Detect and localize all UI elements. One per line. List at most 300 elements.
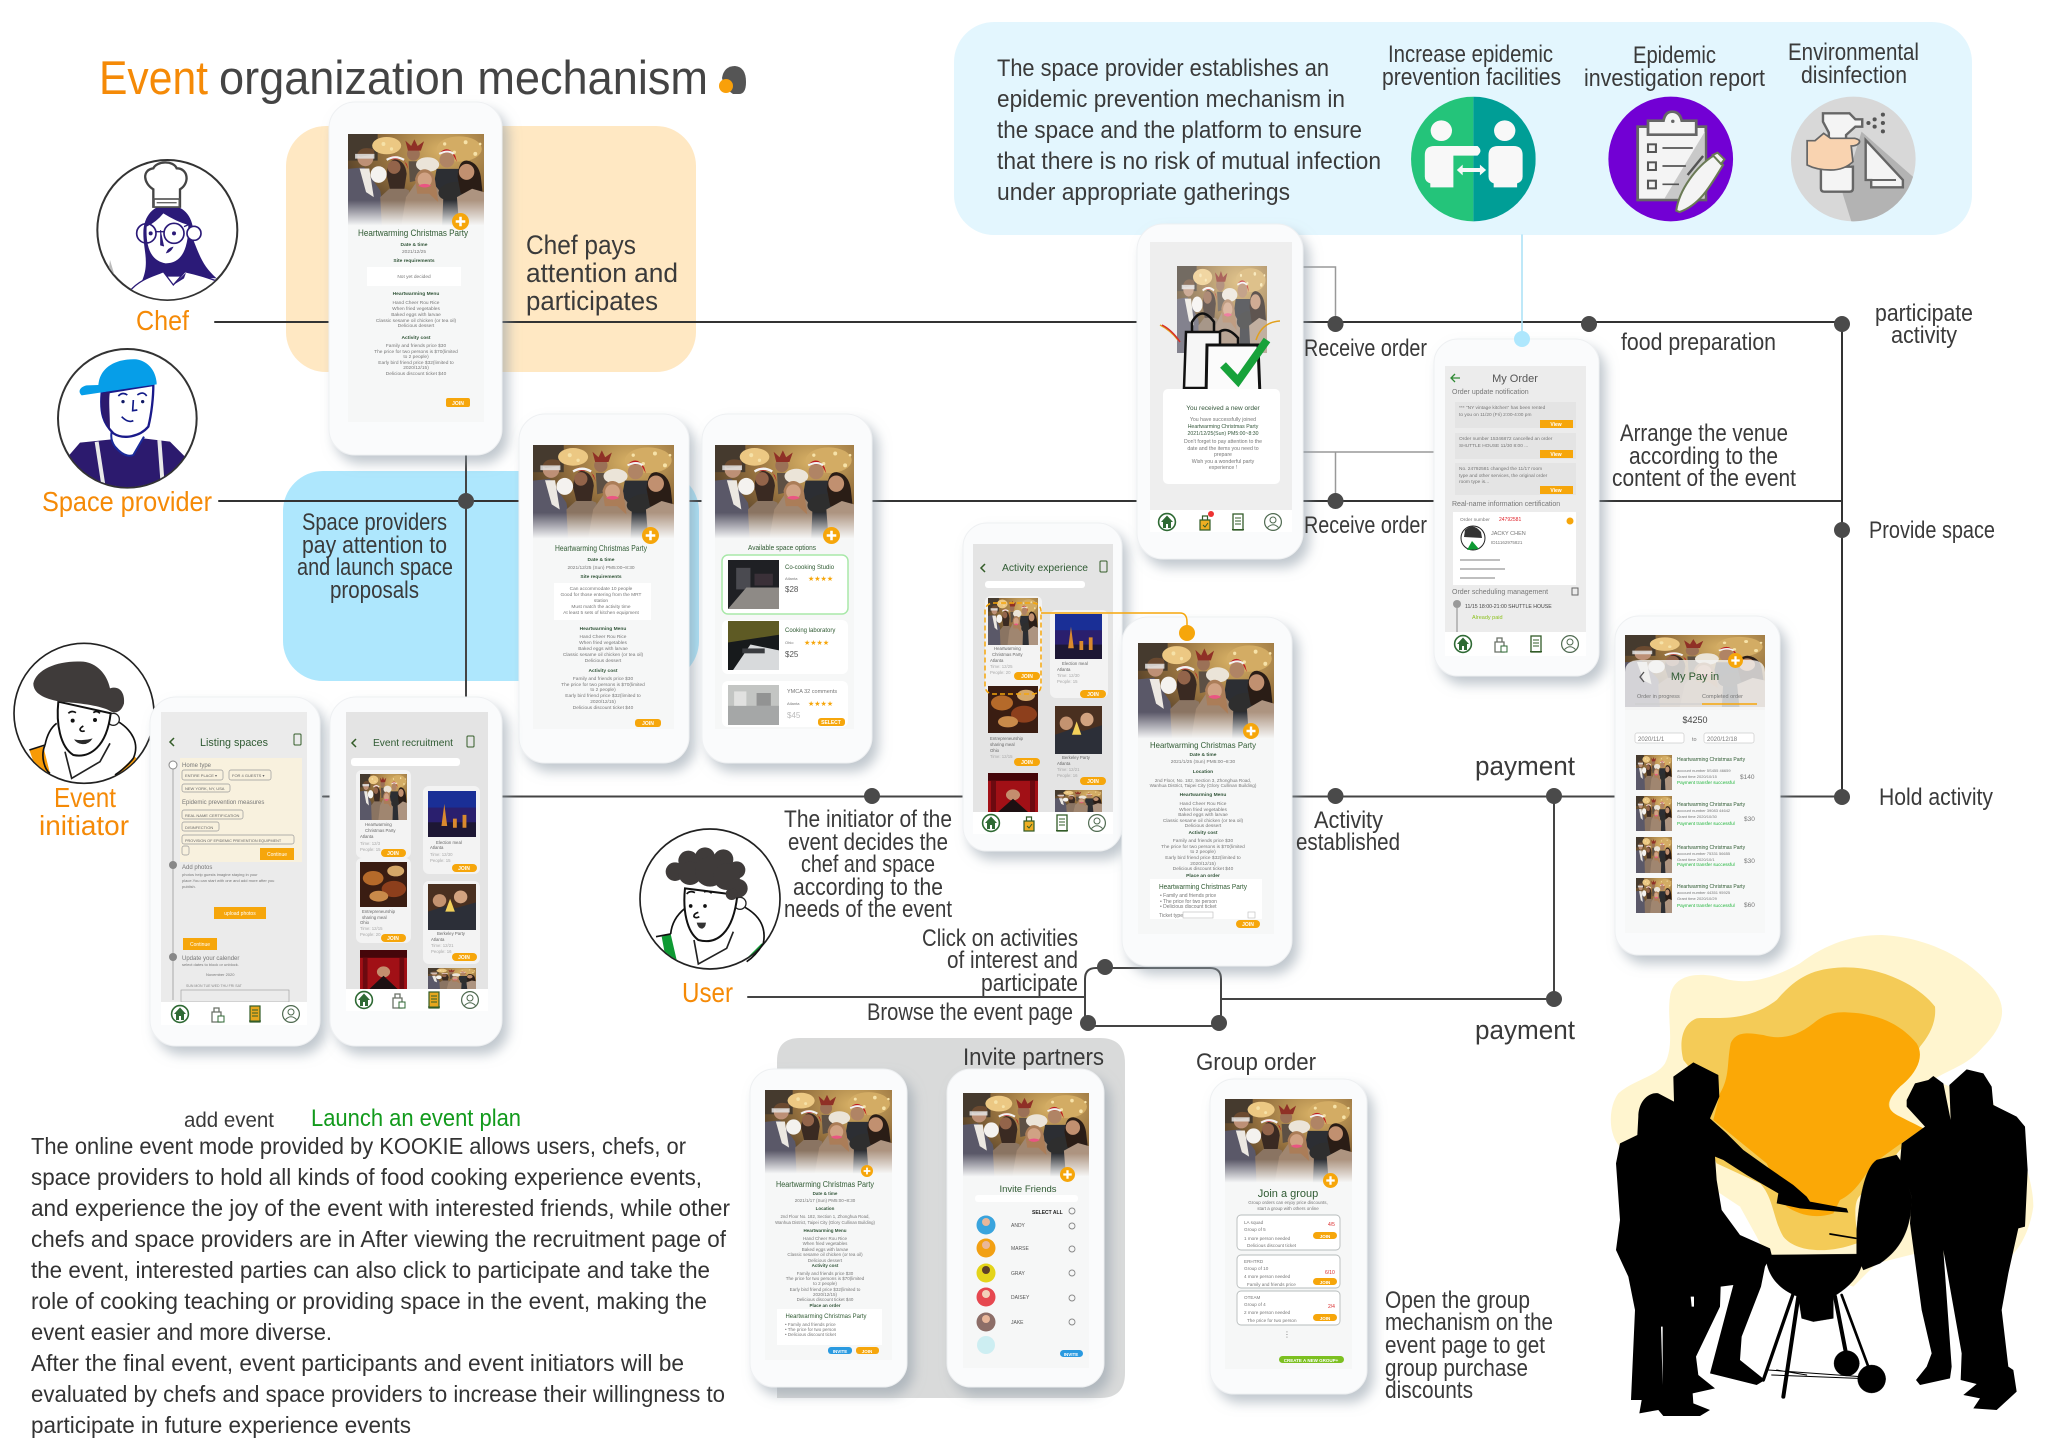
phone: activity experience xyxy=(963,523,1122,851)
phone: my pay in: Heartwarming Christmas Party xyxy=(1677,757,1746,763)
label: event initiator xyxy=(39,782,129,841)
phone: activity experience: JOIN xyxy=(1021,760,1033,766)
phone: receive order confirmation: Don't forget to pay attention to the xyxy=(1184,439,1262,445)
phone: event details with order: When fried vegetables xyxy=(1179,807,1227,813)
phone: space proposal: Baked eggs with larvae xyxy=(578,646,628,652)
phone: my order: JACKY CHEN xyxy=(1491,531,1526,537)
phone: join a group: 4 more person needed xyxy=(1244,1274,1291,1279)
phone: invite event page: • Delicious discount ticket xyxy=(785,1332,837,1337)
phone: invite event page: Hand Cheer Rou Rice xyxy=(803,1236,848,1241)
phone: event details with order: Classic sesame oil chicken (or tea oil) xyxy=(1163,818,1244,824)
phone: event recruitment: Atlanta xyxy=(430,845,444,850)
phone: chef event page: Early bird friend price $32(limited to xyxy=(378,360,454,366)
phone: event details with order xyxy=(1122,617,1292,966)
connector dot: orange xyxy=(1179,625,1195,641)
phone: my pay in: Heartwarming Christmas Party xyxy=(1677,802,1746,808)
phone: my order: No. 24792581 changed the 11/17 room xyxy=(1459,466,1542,472)
friend list: JAKE xyxy=(1011,1320,1024,1326)
text block: description: After the final event, event participants and event initiators will be xyxy=(31,1350,684,1376)
phone: my order: ID11162975821 xyxy=(1491,540,1523,545)
phone: event details with order: Date & time xyxy=(1190,752,1217,758)
phone: my pay in xyxy=(1615,616,1780,955)
phone: receive order confirmation: Wish you a wonderful party xyxy=(1192,459,1255,465)
phone: my pay in: account number 5S455 46659 xyxy=(1677,768,1731,773)
label: participate activity: participate xyxy=(1875,300,1973,327)
phone: event recruitment: Ohio xyxy=(360,920,370,925)
label: event initiator: initiator xyxy=(39,810,129,841)
silhouette: grill xyxy=(1763,1155,1912,1397)
phone: invite event page: Baked eggs with larvae xyxy=(802,1247,849,1252)
label: space provider: Space provider xyxy=(42,486,212,517)
phone: activity experience: Atlanta xyxy=(990,658,1004,663)
text block: description: participate in future experience events xyxy=(31,1412,411,1438)
phone: listing spaces form: NEW YORK, NY, USA xyxy=(185,786,225,791)
phone: space proposal: Must match the activity time xyxy=(571,604,631,610)
text: space providers launch proposals: and launch space xyxy=(297,554,453,581)
phone: join a group: OTEAM xyxy=(1244,1295,1261,1300)
friend list: ANDY xyxy=(1011,1223,1026,1229)
phone: listing spaces form: FOR 4 GUESTS ▾ xyxy=(232,773,264,778)
phone: listing spaces form: publish. xyxy=(182,884,196,889)
connector: selected event to detail page xyxy=(985,603,1187,694)
phone: my order: Order number 15346872 cancelled an order xyxy=(1459,436,1553,442)
phone: my order: 11/15 18:00-21:00 SHUTTLE HOUSE xyxy=(1465,604,1552,610)
phone: event details with order: • Delicious discount ticket xyxy=(1160,904,1217,910)
phone: event recruitment: Heartwarming xyxy=(365,822,392,827)
label: open the group mechanism: discounts xyxy=(1385,1377,1473,1404)
icon: space provider avatar xyxy=(58,349,197,493)
text: space providers launch proposals xyxy=(297,509,453,604)
phone: event details with order: • The price for two person xyxy=(1160,899,1217,905)
phone: event recruitment: Time: 12/15 xyxy=(360,926,383,931)
phone: listing spaces form: Home type xyxy=(182,763,212,769)
label: click on activities: Click on activities xyxy=(922,925,1078,952)
phone: join a group: ERHTRD xyxy=(1244,1259,1264,1264)
phone: chef event page: Family and friends price $30 xyxy=(386,343,446,349)
icon: user avatar xyxy=(640,829,780,970)
phone: receive order confirmation: date and the items you need to xyxy=(1187,446,1259,452)
phone: event recruitment: Time: 12/3 xyxy=(360,841,381,846)
icon: title badge xyxy=(719,66,746,94)
phone: event recruitment: Berkeley Party xyxy=(437,931,466,936)
phone: invite event page: Delicious discount ticket $40 xyxy=(797,1297,854,1302)
label: arrange the venue: Arrange the venue xyxy=(1620,420,1788,447)
phone: invite friends: INVITE xyxy=(1064,1352,1078,1357)
heading: epidemic investigation report: investigation report xyxy=(1584,65,1765,92)
phone: listing spaces form: photos help guests imagine staying in your xyxy=(182,872,258,877)
phone: event details with order: Hand Cheer Rou Rice xyxy=(1180,801,1227,807)
phone: invite event page: Activity cost xyxy=(812,1263,839,1268)
phone: listing spaces form: Add photos xyxy=(182,865,212,871)
phone: event recruitment: Atlanta xyxy=(360,834,374,839)
phone: join a group: The price for two person xyxy=(1247,1318,1297,1323)
phone: chef event page: 2021/12/25 xyxy=(402,249,426,255)
phone: activity experience: JOIN xyxy=(1087,692,1099,698)
text: epidemic prevention mechanism xyxy=(997,55,1381,206)
connector dot: light blue xyxy=(1514,331,1530,347)
label: click on activities: participate xyxy=(981,970,1078,997)
label: launch an event plan: Launch an event plan xyxy=(311,1105,521,1132)
label: click on activities: of interest and xyxy=(947,947,1078,974)
phone: space proposal: Delicious dessert xyxy=(585,658,622,664)
panel: invite partners grey backdrop xyxy=(777,1038,1125,1398)
phone: my order: SHUTTLE HOUSE 11/30 8:00 ... xyxy=(1459,443,1528,449)
label: initiator decides: according to the xyxy=(793,874,943,901)
phone: event recruitment: Event recruitment xyxy=(373,738,453,749)
phone: available space options: ★★★★ xyxy=(808,700,833,708)
phone: event details with order: • Family and friends price xyxy=(1160,893,1216,899)
phone: join a group: 2/4 xyxy=(1328,1304,1335,1310)
phone: space proposal: Can accommodate 10 people xyxy=(570,586,633,592)
label: open the group mechanism: Open the group xyxy=(1385,1287,1530,1314)
label: add event: add event xyxy=(184,1109,274,1132)
text: space providers launch proposals: Space providers xyxy=(302,509,447,536)
text: epidemic prevention mechanism: under appropriate gatherings xyxy=(997,179,1290,206)
phone: available space options: Co-cooking Studio xyxy=(785,565,835,571)
phone: my order: Order update notification xyxy=(1452,389,1529,396)
phone: event details with order: Activity cost xyxy=(1188,830,1218,836)
heading: increase epidemic prevention facilities xyxy=(1382,41,1561,91)
phone: join a group: Delicious discount ticket xyxy=(1247,1243,1297,1248)
phone: event details with order: 2021/1/25 (Sun) PM5:00~8:30 xyxy=(1171,759,1236,765)
label: chef: Chef xyxy=(136,305,189,336)
phone: event recruitment: Election meal xyxy=(436,840,462,845)
phone: join a group: Group of 10 xyxy=(1244,1266,1269,1271)
phone: my order: Already paid xyxy=(1472,615,1503,621)
phone: activity experience: Entrepreneurship xyxy=(990,736,1024,741)
phone: my order: View xyxy=(1550,488,1562,494)
label: hold activity: Hold activity xyxy=(1879,784,1993,811)
phone: chef event page: Not yet decided xyxy=(397,274,431,280)
phone: space proposal: station xyxy=(594,598,608,604)
phone: listing spaces form: Epidemic prevention measures xyxy=(182,800,264,806)
phone: chef event page: 2020/12/15) xyxy=(403,365,429,371)
phone: activity experience: Atlanta xyxy=(1057,761,1071,766)
phone: my order: to you on 11/20 (Fri) 2:00-4:00 pm xyxy=(1459,412,1531,418)
text block: description: role of cooking teaching or providing space in the event, making the xyxy=(31,1288,707,1314)
icon: disinfection spray xyxy=(1791,97,1917,223)
phone: listing spaces form: ENTIRE PLACE ▾ xyxy=(185,773,217,778)
silhouette: left people xyxy=(1616,1062,1848,1416)
text: epidemic prevention mechanism: The space provider establishes an xyxy=(997,55,1329,82)
phone: event details with order: 2020/12/15) xyxy=(1190,861,1216,867)
phone: receive order confirmation: You have successfully joined xyxy=(1190,417,1256,423)
phone: invite event page: Date & time xyxy=(813,1191,838,1196)
label: participate activity: activity xyxy=(1891,322,1957,349)
label: arrange the venue xyxy=(1612,420,1796,492)
phone: my pay in: Grant time 2020/10/29 xyxy=(1677,896,1718,901)
phone: event recruitment: Time: 12/21 xyxy=(431,943,454,948)
phone: listing spaces form: SUN MON TUE WED THU FRI SAT xyxy=(186,984,243,988)
phone: my pay in: Heartwarming Christmas Party xyxy=(1677,845,1746,851)
phone: invite event page: • Family and friends price xyxy=(785,1322,836,1327)
phone: activity experience: Heartwarming xyxy=(994,646,1021,651)
phone: invite event page: • The price for two person xyxy=(785,1327,837,1332)
flow nodes xyxy=(458,316,1850,1031)
photo: party xyxy=(348,134,484,226)
phone: invite event page: Delicious dessert xyxy=(808,1258,843,1263)
flow lines and connectors xyxy=(215,235,1842,1026)
text block: description: event easier and more diverse. xyxy=(31,1319,332,1345)
icon: chef avatar xyxy=(97,160,237,307)
panel: epidemic prevention xyxy=(954,22,1972,235)
phone: event recruitment xyxy=(330,697,502,1046)
phone: space proposal: At least 5 sets of kitchen equipment xyxy=(563,610,640,616)
phone: join a group: Group of 4 xyxy=(1244,1302,1266,1307)
phone: join a group: JOIN xyxy=(1320,1234,1330,1239)
phone: my order xyxy=(1434,339,1599,676)
phone: chef event page: The price for two persons is $70(limited xyxy=(374,349,458,355)
phone: available space options: $25 xyxy=(785,650,799,659)
phone: space proposal: 2020/12/15) xyxy=(590,699,616,705)
text: chef pays attention xyxy=(526,230,678,316)
phone: chef event page: Baked eggs with larvae xyxy=(391,312,441,318)
phone: event recruitment: JOIN xyxy=(458,866,470,872)
phone: join a group: Group orders can enjoy price discounts, xyxy=(1248,1200,1328,1205)
phone: available space options: ★★★★ xyxy=(804,639,829,647)
phone: listing spaces form xyxy=(150,697,320,1046)
phone: available space options: Atlanta xyxy=(787,701,800,706)
phone: chef event page: to 2 people) xyxy=(403,354,429,360)
label: open the group mechanism: group purchase xyxy=(1385,1355,1528,1382)
phone: my order: room type is... xyxy=(1459,479,1489,485)
label: activity established: established xyxy=(1296,829,1400,856)
phone: space proposal: When fried vegetables xyxy=(579,640,627,646)
phone: invite event page: to 2 people) xyxy=(813,1281,837,1286)
phone: my order: 24792581 xyxy=(1499,517,1521,523)
icon: event initiator avatar xyxy=(14,643,154,783)
phone: chef event page: Delicious discount ticket $40 xyxy=(386,371,447,377)
phone: space proposal: Classic sesame oil chicken (or tea oil) xyxy=(563,652,644,658)
text: chef pays attention: Chef pays xyxy=(526,230,636,260)
phone: available space options: $45 xyxy=(787,711,801,720)
text: chef pays attention: participates xyxy=(526,286,658,316)
text block: description: evaluated by chefs and space providers to increase their willingness to xyxy=(31,1381,725,1407)
phone: chef event page: When fried vegetables xyxy=(392,306,440,312)
phone: invite event page: Heartwarming Menu xyxy=(803,1228,847,1233)
heading: environmental disinfection xyxy=(1788,39,1919,89)
label: open the group mechanism: event page to get xyxy=(1385,1332,1545,1359)
text: space providers launch proposals: proposals xyxy=(330,577,419,604)
label: click on activities xyxy=(922,925,1078,997)
phone: event recruitment: sharing meal xyxy=(362,915,387,920)
label: receive order chef: Receive order xyxy=(1304,335,1427,362)
phone: activity experience: Time: 12/25 xyxy=(990,664,1013,669)
phone: my pay in: $4250 xyxy=(1682,715,1708,725)
label: payment lower: payment xyxy=(1475,1015,1575,1045)
phone: my order: Real-name information certification xyxy=(1452,501,1560,508)
text block: description xyxy=(31,1133,730,1438)
label: initiator decides: needs of the event xyxy=(784,896,952,923)
phone: event recruitment: People: 15 xyxy=(430,858,451,863)
phone: available space options: YMCA 32 comments xyxy=(787,689,837,695)
phone: my pay in: $140 xyxy=(1740,774,1755,781)
phone: join a group: Group of 5 xyxy=(1244,1227,1266,1232)
phone: my order: My Order xyxy=(1492,373,1538,385)
phone: invite event page: Location xyxy=(816,1206,835,1211)
phone: my order: View xyxy=(1550,422,1562,428)
phone: listing spaces form: select dates to block or unblock. xyxy=(182,962,239,967)
label: open the group mechanism: mechanism on the xyxy=(1385,1309,1553,1336)
label: initiator decides xyxy=(784,806,952,923)
phone: event recruitment: Atlanta xyxy=(431,937,445,942)
label: payment upper: payment xyxy=(1475,751,1575,781)
label: arrange the venue: according to the xyxy=(1629,443,1778,470)
phone: chef event page: Heartwarming Christmas Party xyxy=(358,228,468,238)
phone: receive order confirmation: You received a new order xyxy=(1186,405,1261,412)
phone: event recruitment: People: 16 xyxy=(431,949,452,954)
illustration: barbecue silhouettes over colour blobs xyxy=(1611,935,2033,1416)
phone: listing spaces form: Update your calender xyxy=(182,956,239,962)
phone: invite event page: 2021/1/17 (Sun) PM5:00~8:30 xyxy=(795,1198,856,1203)
phone: activity experience: Atlanta xyxy=(1057,667,1071,672)
phone: event recruitment: Christmas Party xyxy=(365,828,396,833)
phone: event details with order: Ticket type xyxy=(1159,913,1183,919)
phone: activity experience: JOIN xyxy=(1021,674,1033,680)
phone: activity experience: Ohio xyxy=(990,748,1000,753)
phone: listing spaces form: November 2020 xyxy=(206,972,235,977)
phone: my pay in: Grant time 2020/10/1 xyxy=(1677,857,1715,862)
phone: join a group: 1 more person needed xyxy=(1244,1236,1291,1241)
friend list: GRAY xyxy=(1011,1271,1025,1277)
label: provide space: Provide space xyxy=(1869,517,1995,544)
text: epidemic prevention mechanism: epidemic prevention mechanism in xyxy=(997,86,1345,113)
phone: event recruitment: People: 15 xyxy=(360,847,381,852)
phone: receive order confirmation: experience ! xyxy=(1209,465,1237,471)
phone: listing spaces form: Continue xyxy=(190,942,210,948)
friend list: DAISEY xyxy=(1011,1295,1030,1301)
phone: my pay in: Completed order xyxy=(1702,694,1743,700)
phone: space proposal: Hand Cheer Rou Rice xyxy=(580,634,627,640)
phone: receive order confirmation xyxy=(1137,224,1303,559)
phone: receive order confirmation: Heartwarming Christmas Party xyxy=(1188,424,1259,430)
phone: space proposal: Activity cost xyxy=(588,668,618,674)
phone: my pay in: Payment transfer successful xyxy=(1677,862,1735,867)
phone: join a group: Family and friends price xyxy=(1247,1282,1296,1287)
label: participate activity xyxy=(1875,300,1973,349)
phone: chef event page xyxy=(329,102,502,455)
phone: my pay in: Heartwarming Christmas Party xyxy=(1677,884,1746,890)
phone: invite friends: SELECT ALL xyxy=(1032,1210,1063,1216)
phone: space proposal: to 2 people) xyxy=(590,687,616,693)
phone: my order: Order scheduling management xyxy=(1452,589,1548,596)
text block: description: The online event mode provided by KOOKIE allows users, chefs, or xyxy=(31,1133,686,1159)
phone: activity experience: Election meal xyxy=(1062,661,1088,666)
phone: chef event page: Classic sesame oil chicken (or tea oil) xyxy=(376,318,457,324)
heading: epidemic investigation report: Epidemic xyxy=(1633,42,1716,69)
phone: event details with order: to 2 people) xyxy=(1190,849,1216,855)
phone: invite event page: 2nd Floor No. 182, Section 1, Zhonghua Road, xyxy=(780,1214,870,1219)
label: invite partners: Invite partners xyxy=(963,1044,1104,1071)
label: user: User xyxy=(682,977,733,1008)
phone: chef event page: Heartwarming Menu xyxy=(393,291,439,297)
phone: my pay in: My Pay in xyxy=(1671,671,1719,683)
phone: listing spaces form: upload photos xyxy=(224,911,256,917)
phone: my pay in: $60 xyxy=(1744,902,1755,909)
phone: invite event page: Early bird friend price $32(limited to xyxy=(790,1287,861,1292)
phone: available space options: Atlanta xyxy=(785,576,798,581)
phone: my pay in: account number 75331 56655 xyxy=(1677,851,1731,856)
phone: event details with order: 2nd Floor, No. 182, Section 3, Zhonghua Road, xyxy=(1155,778,1251,783)
phone: space proposal xyxy=(519,414,689,763)
phone: activity experience: Time: 12/21 xyxy=(1057,767,1080,772)
phone: join a group: 2 more person needed xyxy=(1244,1310,1291,1315)
heading: increase epidemic prevention facilities: Increase epidemic xyxy=(1388,41,1553,68)
phone: invite friends xyxy=(947,1069,1104,1387)
phone: my pay in: Grant time 2020/10/30 xyxy=(1677,814,1718,819)
phone: activity experience: Activity experience xyxy=(1002,563,1088,574)
phone: join a group: CREATE A NEW GROUP+ xyxy=(1284,1358,1339,1363)
phone: my pay in: Grant time 2020/10/15 xyxy=(1677,774,1718,779)
phone: chef event page: Activity cost xyxy=(401,335,431,341)
text: epidemic prevention mechanism: that there is no risk of mutual infection xyxy=(997,148,1381,175)
phone: event details with order: Delicious discount ticket $40 xyxy=(1173,866,1234,872)
text: chef pays attention: attention and xyxy=(526,258,678,288)
label: initiator decides: chef and space xyxy=(801,851,935,878)
title: organization mechanism xyxy=(219,51,708,104)
phone: event recruitment: Time: 12/30 xyxy=(430,852,453,857)
phone: activity experience: Berkeley Party xyxy=(1062,755,1091,760)
phone: invite event page: Heartwarming Christmas Party xyxy=(776,1180,874,1189)
phone: my pay in: $30 xyxy=(1744,816,1755,823)
phone: chef event page: Date & time xyxy=(401,242,428,248)
phone: space proposal: Delicious discount ticket $40 xyxy=(573,705,634,711)
phone: join a group: JOIN xyxy=(1320,1280,1330,1285)
panel: space provider blue backdrop xyxy=(283,471,699,681)
text: space providers launch proposals: pay attention to xyxy=(302,532,447,559)
phone: invite event page: The price for two persons is $70(limited xyxy=(786,1276,865,1281)
phone: chef event page: Hand Cheer Rou Rice xyxy=(393,300,440,306)
icon: distancing people xyxy=(1411,97,1536,222)
phone: event details with order: Family and friends price $30 xyxy=(1173,838,1233,844)
phone: available space options: Available space options xyxy=(748,543,816,552)
phone: activity experience: sharing meal xyxy=(990,742,1015,747)
phone: invite event page: Wanhua District, Taipei City (Glory Cullinan Building) xyxy=(775,1220,875,1225)
phone: my pay in: Payment transfer successful xyxy=(1677,780,1735,785)
phone: available space options: SELECT xyxy=(821,720,841,726)
phone: available space options: Ohio xyxy=(785,640,794,645)
text block: description: chefs and space providers are in After viewing the recruitment page of xyxy=(31,1226,727,1252)
phone: event recruitment: Entrepreneurship xyxy=(362,909,396,914)
phone: activity experience: Christmas Party xyxy=(992,652,1023,657)
label: receive order space: Receive order xyxy=(1304,512,1427,539)
phone: activity experience: Time: 12/15 xyxy=(990,754,1013,759)
text block: description: space providers to hold all kinds of food cooking experience events, xyxy=(31,1164,702,1190)
phone: space proposal: Early bird friend price $32(limited to xyxy=(565,693,641,699)
phone: my order: *** "NY vintage kitchen" has been rented xyxy=(1459,405,1546,411)
phone: chef event page: JOIN xyxy=(452,401,464,407)
label: initiator decides: event decides the xyxy=(788,829,948,856)
phone: space proposal: Heartwarming Menu xyxy=(580,626,626,632)
phone: receive order confirmation: prepare xyxy=(1214,452,1232,458)
text: epidemic prevention mechanism: the space and the platform to ensure xyxy=(997,117,1362,144)
phone: join a group xyxy=(1210,1079,1367,1394)
phone: event details with order: Heartwarming Christmas Party xyxy=(1150,740,1257,750)
phone: event recruitment: JOIN xyxy=(458,955,470,961)
phone: space proposal: Family and friends price $30 xyxy=(573,676,633,682)
phone: activity experience: People: 16 xyxy=(1057,773,1078,778)
phone: listing spaces form: place.You can start with one and add more after you xyxy=(182,878,274,883)
phone: invite event page: Family and friends price $30 xyxy=(797,1271,854,1276)
phone: event details with order: Heartwarming Christmas Party xyxy=(1159,884,1247,891)
phone: receive order confirmation: 2021/12/25(Sun) PM5:00~8:30 xyxy=(1187,431,1259,437)
phone: listing spaces form: Continue xyxy=(267,852,287,858)
heading: increase epidemic prevention facilities: prevention facilities xyxy=(1382,64,1561,91)
friend list xyxy=(976,1216,1030,1354)
phone: invite event page: INVITE xyxy=(833,1349,847,1354)
phone: space proposal: JOIN xyxy=(642,721,654,727)
label: group order: Group order xyxy=(1196,1049,1316,1076)
